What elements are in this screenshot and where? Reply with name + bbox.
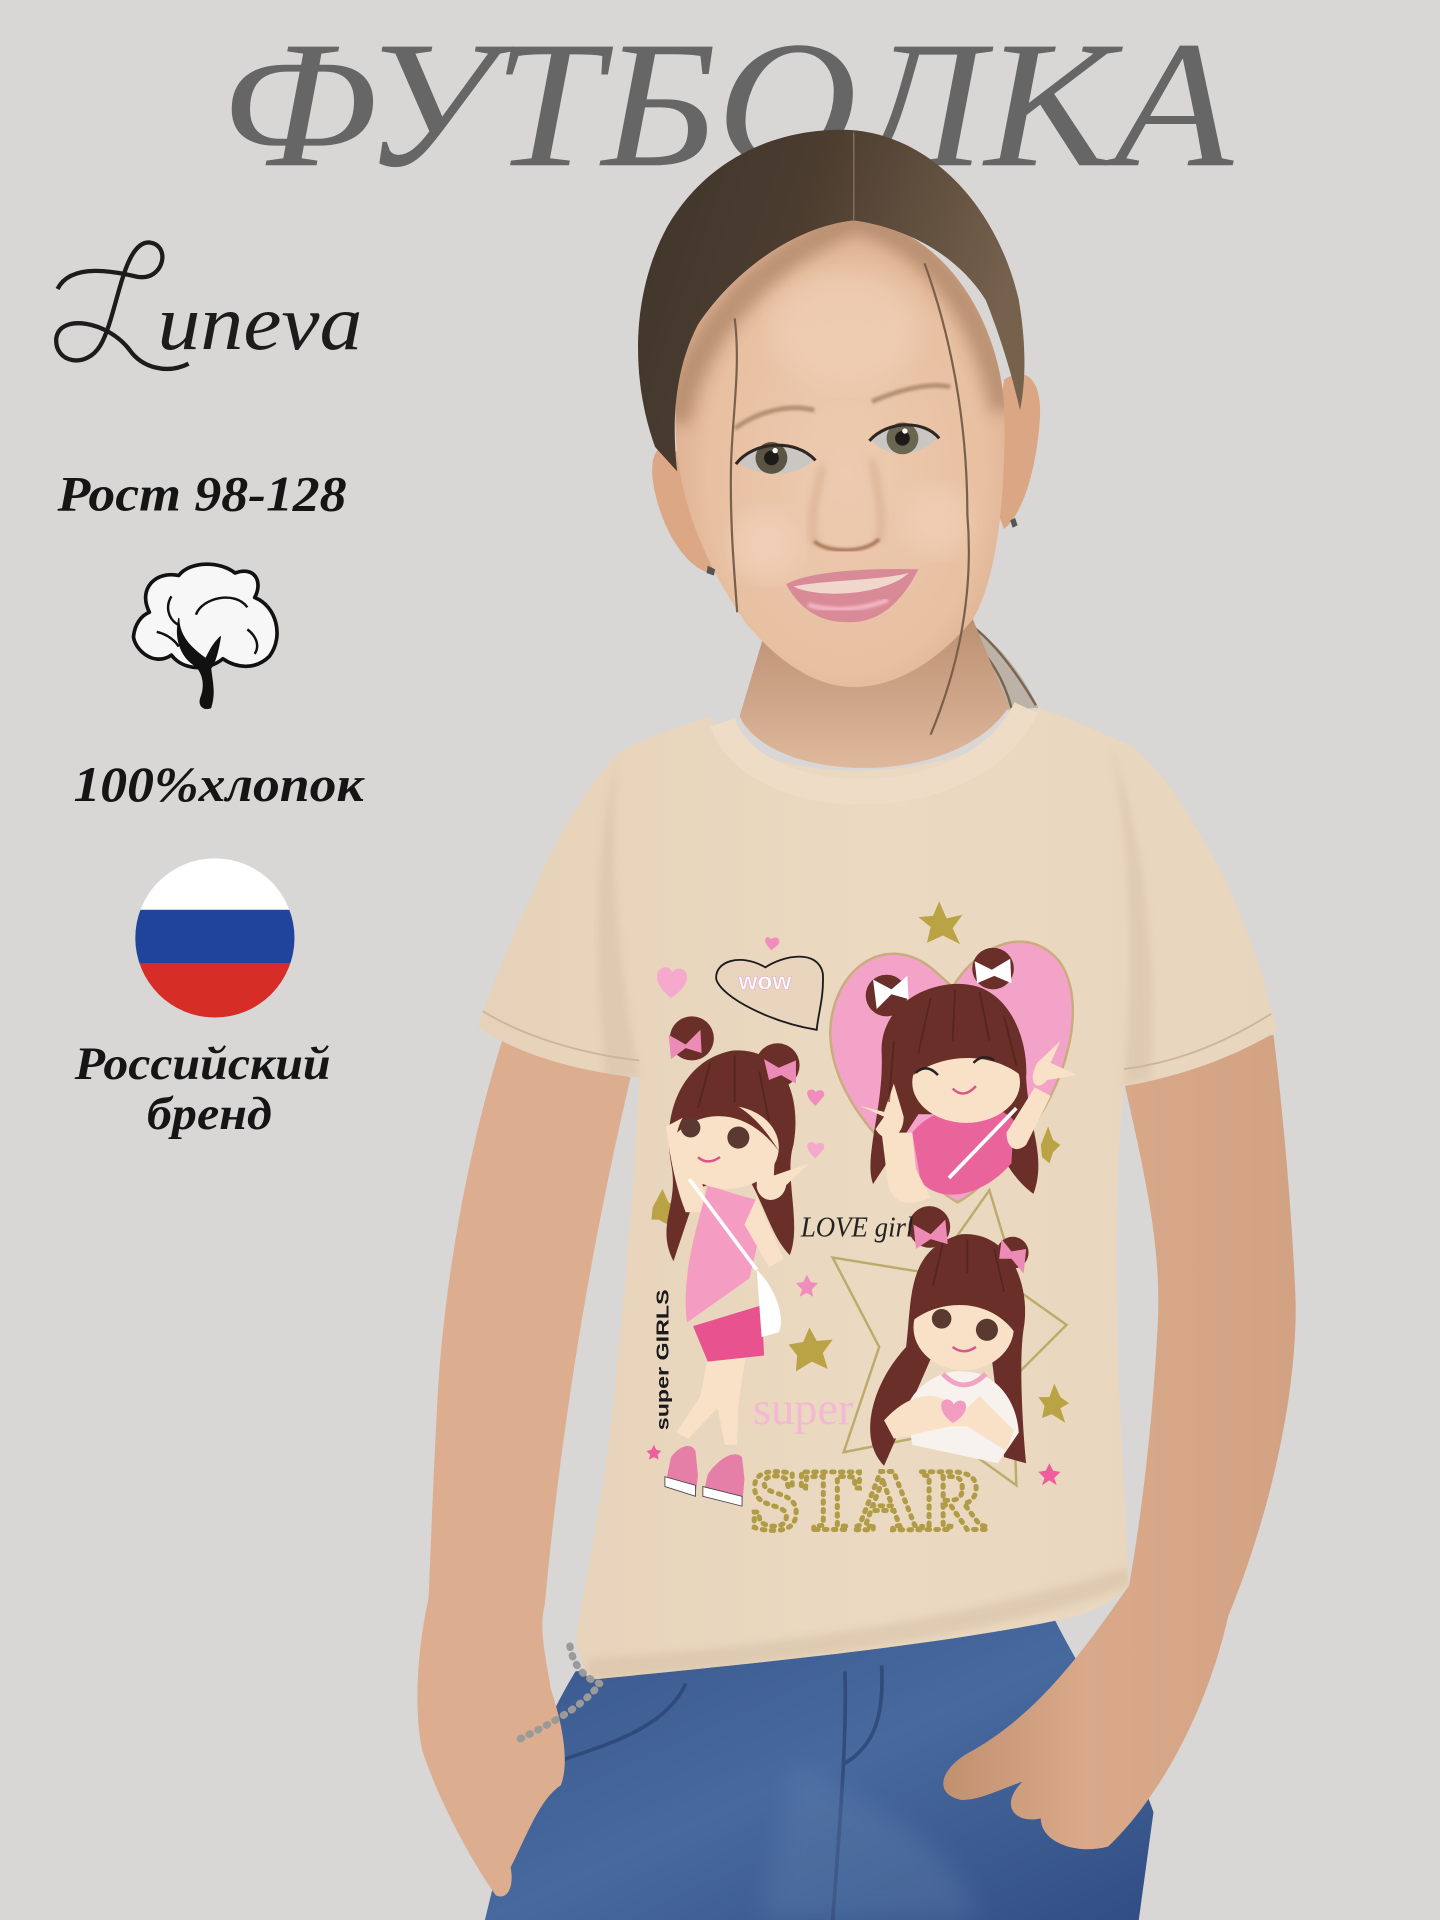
right arm and hand bbox=[943, 1035, 1296, 1849]
girl right in heart bbox=[860, 948, 1078, 1203]
mouth bbox=[786, 569, 918, 622]
icon: russian flag bbox=[135, 857, 296, 1018]
text: russian brand: Российский bbox=[74, 1039, 331, 1090]
ear right bbox=[989, 374, 1040, 529]
left eye bbox=[736, 442, 816, 474]
nose bbox=[812, 459, 881, 550]
pink heart bbox=[830, 942, 1073, 1202]
speech heart wow: wow bbox=[737, 968, 792, 995]
left arm and hand bbox=[417, 1041, 631, 1896]
panel: brand and features bbox=[56, 242, 365, 1140]
icon: cotton boll bbox=[133, 564, 277, 708]
title: ФУТБОЛКА bbox=[220, 5, 1234, 205]
gold stars bbox=[651, 901, 1069, 1423]
text: height range: Рост 98-128 bbox=[56, 466, 347, 522]
girl bottom bbox=[870, 1206, 1029, 1466]
text: fabric: 100%хлопок bbox=[73, 756, 365, 812]
pink stars and hearts bbox=[647, 937, 1060, 1485]
ponytail bbox=[967, 624, 1038, 710]
t-shirt bbox=[478, 708, 1277, 1680]
logo: Luneva: Luneva bbox=[156, 279, 362, 366]
bracelet bbox=[520, 1638, 600, 1739]
photo: girl in t-shirt bbox=[417, 130, 1296, 1920]
face bbox=[675, 218, 1018, 687]
collar bbox=[722, 708, 1026, 792]
text: star: STAR bbox=[749, 1451, 987, 1549]
speech heart wow bbox=[716, 957, 823, 1030]
ear left bbox=[652, 447, 722, 573]
right eye bbox=[869, 422, 939, 454]
girl left bbox=[665, 1016, 809, 1506]
hair bbox=[638, 130, 1024, 735]
text: super girls: super GIRLS bbox=[653, 1289, 673, 1430]
text: russian brand: бренд bbox=[147, 1089, 272, 1140]
big star outline bbox=[833, 1190, 1067, 1485]
eyebrows bbox=[735, 385, 950, 429]
neck bbox=[740, 606, 1009, 768]
shoes bbox=[665, 1446, 744, 1506]
logo: Luneva bbox=[56, 242, 362, 369]
text: super: super bbox=[753, 1384, 854, 1435]
text: love girl: LOVE girl bbox=[800, 1213, 914, 1244]
jeans bbox=[485, 1616, 1153, 1920]
t-shirt print bbox=[647, 901, 1078, 1549]
earrings bbox=[707, 518, 1018, 576]
